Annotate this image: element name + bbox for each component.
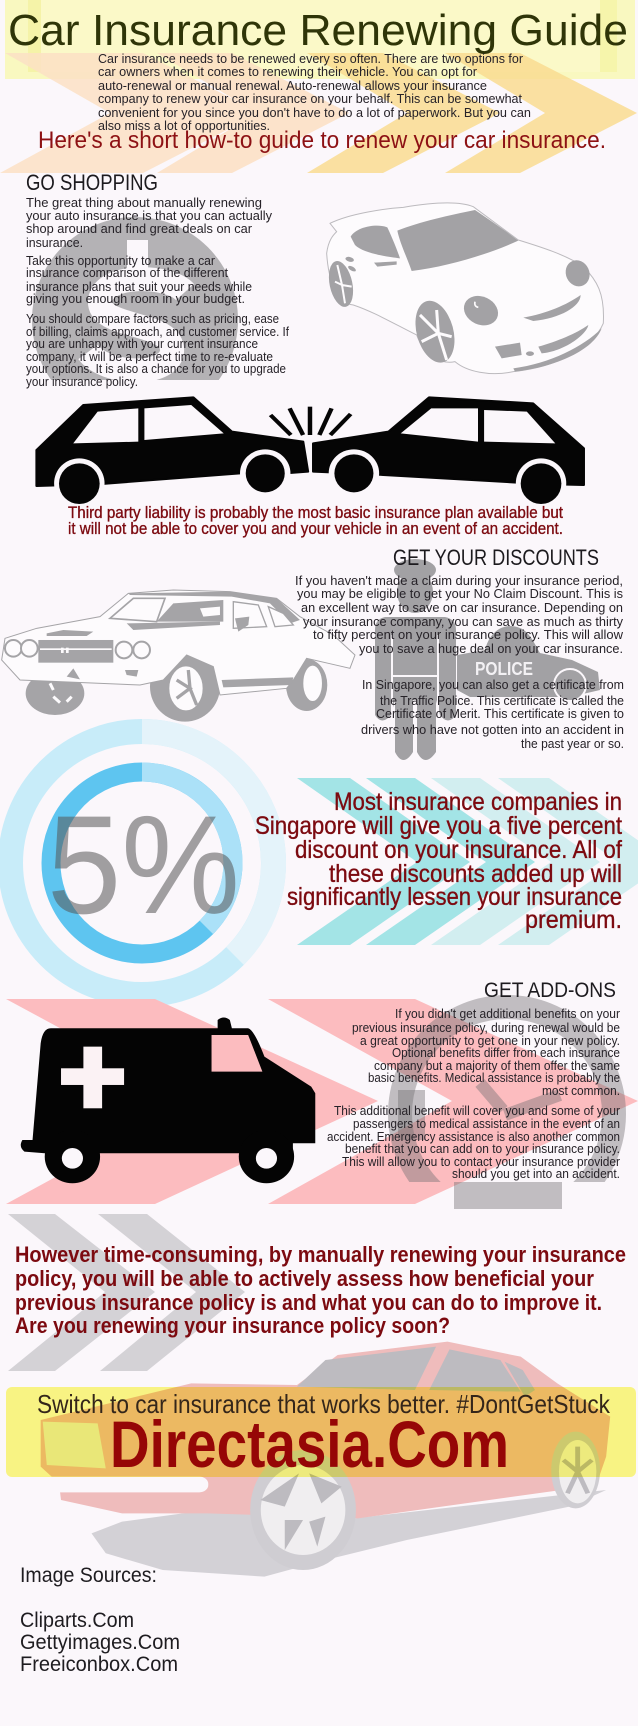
- go shopping text: company, it will be a perfect time to re-evaluate: [26, 349, 273, 364]
- heading: get your discounts: GET YOUR DISCOUNTS: [393, 545, 599, 570]
- go shopping text: Take this opportunity to make a car: [26, 253, 216, 268]
- icon: dollar coin: [32, 217, 238, 380]
- intro text: convenient for you since you don't have to do a lot of paperwork. But you can: [98, 105, 531, 120]
- right car: [313, 397, 584, 508]
- discounts text: to fifty percent on your insurance policy. This will allow: [313, 627, 624, 642]
- add-ons text: If you didn't get additional benefits on your: [395, 1007, 620, 1021]
- go shopping text: insurance comparison of the different: [26, 265, 228, 280]
- discounts text: the past year or so.: [521, 736, 624, 751]
- icon: white sports car: [325, 203, 604, 374]
- go shopping text: You should compare factors such as pricing, ease: [26, 311, 279, 326]
- discounts text: you may be eligible to get your No Claim Discount. This is: [297, 586, 623, 601]
- add-ons text: a great opportunity to get one in your new policy.: [360, 1034, 620, 1048]
- discounts text: drivers who have not gotten into an accident in: [361, 722, 624, 737]
- go shopping text: your insurance policy.: [26, 374, 138, 389]
- add-ons text: [327, 1007, 620, 1181]
- heading: go shopping: GO SHOPPING: [26, 170, 158, 195]
- closing statement: [15, 1242, 626, 1338]
- teal chevrons: [297, 778, 638, 945]
- left car: [37, 397, 308, 508]
- intro text: also miss a lot of opportunities.: [98, 118, 270, 133]
- go shopping text: insurance plans that suit your needs while: [26, 279, 252, 294]
- add-ons text: benefit that you can add on to your insurance policy.: [345, 1142, 620, 1156]
- image sources: Gettyimages.Com: [20, 1631, 180, 1654]
- add-ons text: company but a majority of them offer the same: [374, 1059, 620, 1073]
- image sources: Image Sources:: [20, 1564, 157, 1587]
- title: Car Insurance Renewing Guide: [8, 6, 628, 55]
- add-ons text: most common.: [542, 1084, 620, 1098]
- top yellow banner: [5, 0, 635, 79]
- add-ons text: previous insurance policy, during renewal would be: [352, 1021, 620, 1035]
- brand name: Directasia.Com: [110, 1407, 509, 1481]
- intro text: Car insurance needs to be renewed every so often. There are two options for: [98, 51, 524, 66]
- discounts text: your insurance company, you can save as much as thirty: [303, 614, 623, 629]
- go shopping text: your auto insurance is that you can actually: [26, 208, 272, 223]
- icon: pound stopwatch: [398, 1007, 614, 1221]
- add-ons text: should you get into an accident.: [452, 1167, 620, 1181]
- go shopping text: insurance.: [26, 235, 83, 250]
- intro text: [98, 51, 531, 133]
- bottom yellow banner: [6, 1387, 636, 1477]
- intro text: auto-renewal or manual renewal. Auto-renewal allows your insurance: [98, 78, 487, 93]
- 5 percent label: 5%: [47, 786, 240, 943]
- add-ons text: This additional benefit will cover you and some of your: [334, 1104, 620, 1118]
- discounts text: the Traffic Police. This certificate is called the: [380, 693, 624, 708]
- go shopping text: shop around and find great deals on car: [26, 221, 253, 236]
- add-ons text: accident. Emergency assistance is also another common: [327, 1130, 620, 1144]
- discounts text: Certificate of Merit. This certificate is given to: [376, 706, 624, 721]
- third party liability callout: [68, 503, 563, 538]
- go shopping text: you are unhappy with your current insurance: [26, 336, 258, 351]
- add-ons text: This will allow you to contact your insurance provider: [342, 1155, 620, 1169]
- gray chevrons: [8, 1214, 245, 1371]
- discounts text: you to save a huge deal on your car insurance.: [359, 641, 623, 656]
- go shopping text: your options. It is also a chance for you to upgrade: [26, 361, 286, 376]
- add-ons text: basic benefits. Medical assistance is probably the: [368, 1071, 620, 1085]
- pink chevrons: [6, 999, 638, 1204]
- discount callout: premium.: [525, 906, 622, 934]
- add-ons text: passengers to medical assistance in the event of an: [353, 1117, 620, 1131]
- add-ons text: Optional benefits differ from each insurance: [392, 1046, 620, 1060]
- go shopping text: giving you enough room in your budget.: [26, 291, 245, 306]
- image sources: Freeiconbox.Com: [20, 1653, 178, 1676]
- third party liability callout: Third party liability is probably the most basic insurance plan available but: [68, 503, 563, 522]
- discounts text: If you haven't made a claim during your insurance period,: [295, 573, 623, 588]
- icon: red car background: [41, 1342, 610, 1577]
- third party liability callout: it will not be able to cover you and your vehicle in an event of an accident.: [68, 519, 563, 538]
- go shopping text: of billing, claims approach, and customer service. If: [26, 324, 289, 339]
- header chevrons: [0, 53, 637, 173]
- discounts text: an excellent way to save on car insurance. Depending on: [301, 600, 623, 615]
- police label: POLICE: [475, 659, 533, 679]
- heading: get add-ons: GET ADD-ONS: [484, 979, 616, 1002]
- intro text: car owners when it comes to renewing their vehicle. You can opt for: [98, 64, 478, 79]
- discounts text: In Singapore, you can also get a certificate from: [362, 677, 624, 692]
- image sources: [20, 1564, 180, 1676]
- go shopping text: The great thing about manually renewing: [26, 195, 262, 210]
- discount callout: [255, 788, 622, 934]
- crash illustration: [37, 397, 584, 508]
- closing statement: Are you renewing your insurance policy soon?: [15, 1313, 450, 1338]
- closing statement: policy, you will be able to actively assess how beneficial your: [15, 1266, 594, 1291]
- icon: ambulance: [21, 1017, 315, 1183]
- icon: police car: [457, 626, 600, 701]
- discounts text: [295, 573, 624, 751]
- chart: 5 percent rings: [10, 732, 274, 994]
- icon: muscle car: [2, 590, 355, 722]
- image sources: Cliparts.Com: [20, 1609, 134, 1632]
- go shopping text: [26, 195, 289, 389]
- icon: police officer: [375, 559, 456, 762]
- intro text: company to renew your car insurance on your behalf. This can be somewhat: [98, 91, 522, 106]
- impact lines: [271, 407, 351, 435]
- subtitle: Here's a short how-to guide to renew your car insurance.: [38, 127, 606, 154]
